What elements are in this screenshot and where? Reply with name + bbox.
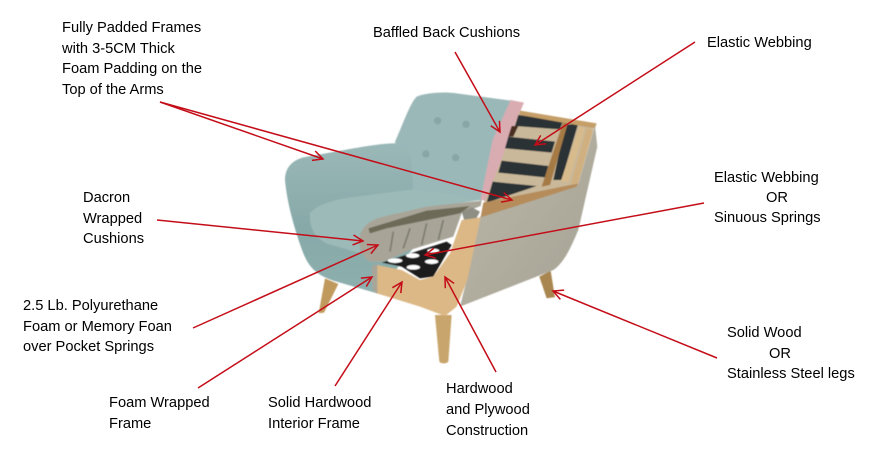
- label: elastic webbing or sinuous springs: Sinuous Springs: [714, 210, 821, 226]
- chair illustration: [285, 93, 597, 363]
- label: legs: Solid Wood: [727, 325, 802, 341]
- label: legs: OR: [769, 346, 791, 362]
- arrow: polyurethane foam: [193, 245, 378, 328]
- label: foam wrapped frame: Foam Wrapped: [109, 395, 210, 411]
- label: dacron wrapped cushions: Wrapped: [83, 211, 142, 227]
- wood slats: [542, 122, 568, 187]
- back cushion: [395, 93, 512, 201]
- icon: front leg: [435, 315, 452, 363]
- label: hardwood and plywood: Construction: [446, 423, 528, 439]
- label: dacron wrapped cushions: Cushions: [83, 231, 144, 247]
- label: fully padded frames: Foam Padding on the: [62, 61, 202, 77]
- label: hardwood and plywood: Hardwood: [446, 381, 513, 397]
- seat cushion: [310, 189, 480, 253]
- brown strap backing: [508, 126, 518, 137]
- arrow: baffled back cushions: [455, 52, 500, 132]
- arrow: elastic webbing back: [535, 42, 695, 145]
- cushion wrinkles: [390, 220, 443, 252]
- label: foam wrapped frame: Frame: [109, 416, 151, 432]
- label: fully padded frames: Fully Padded Frames: [62, 20, 201, 36]
- label: hardwood and plywood: and Plywood: [446, 402, 530, 418]
- callout arrows: [157, 42, 717, 388]
- icon: far left leg: [319, 278, 338, 313]
- label: polyurethane foam: Foam or Memory Foan: [23, 319, 172, 335]
- wooden side rail: [481, 183, 578, 217]
- foam wrapped seat cushion cut: [360, 201, 482, 262]
- black webbing straps: [487, 115, 578, 203]
- arrow: interior frame: [335, 282, 402, 386]
- arrow: foam wrapped frame: [198, 277, 372, 388]
- label: baffled back cushions: Baffled Back Cushions: [373, 25, 520, 41]
- label: polyurethane foam: 2.5 Lb. Polyurethane: [23, 298, 158, 314]
- arrow: padded frame arm: [160, 102, 323, 159]
- arrow: legs: [553, 291, 717, 358]
- label: polyurethane foam: over Pocket Springs: [23, 339, 154, 355]
- foam corner: [462, 207, 480, 224]
- tuft buttons: [422, 117, 470, 161]
- seat webbing black and white: [382, 242, 452, 278]
- label: elastic webbing: Elastic Webbing: [707, 35, 812, 51]
- icon: rear right leg: [539, 271, 555, 298]
- label: elastic webbing or sinuous springs: Elastic Webbing: [714, 170, 819, 186]
- label: legs: Stainless Steel legs: [727, 366, 855, 382]
- label: dacron wrapped cushions: Dacron: [83, 190, 130, 206]
- back frame interior: [483, 111, 595, 205]
- arrow: dacron cushions: [157, 220, 363, 241]
- label: elastic webbing or sinuous springs: OR: [766, 190, 788, 206]
- arrow: padded frame top: [160, 102, 512, 200]
- label: fully padded frames: with 3-5CM Thick: [61, 41, 175, 57]
- grey outer side panel: [460, 125, 597, 307]
- pink foam back edge: [481, 100, 524, 202]
- left arm and body: [285, 143, 457, 293]
- label: solid hardwood interior frame: Interior Frame: [268, 416, 360, 432]
- label: fully padded frames: Top of the Arms: [62, 82, 164, 98]
- label: solid hardwood interior frame: Solid Hardwood: [268, 395, 371, 411]
- wooden frame: [372, 217, 481, 316]
- arrow: seat webbing or springs: [425, 203, 704, 255]
- arrow: plywood construction: [445, 277, 496, 372]
